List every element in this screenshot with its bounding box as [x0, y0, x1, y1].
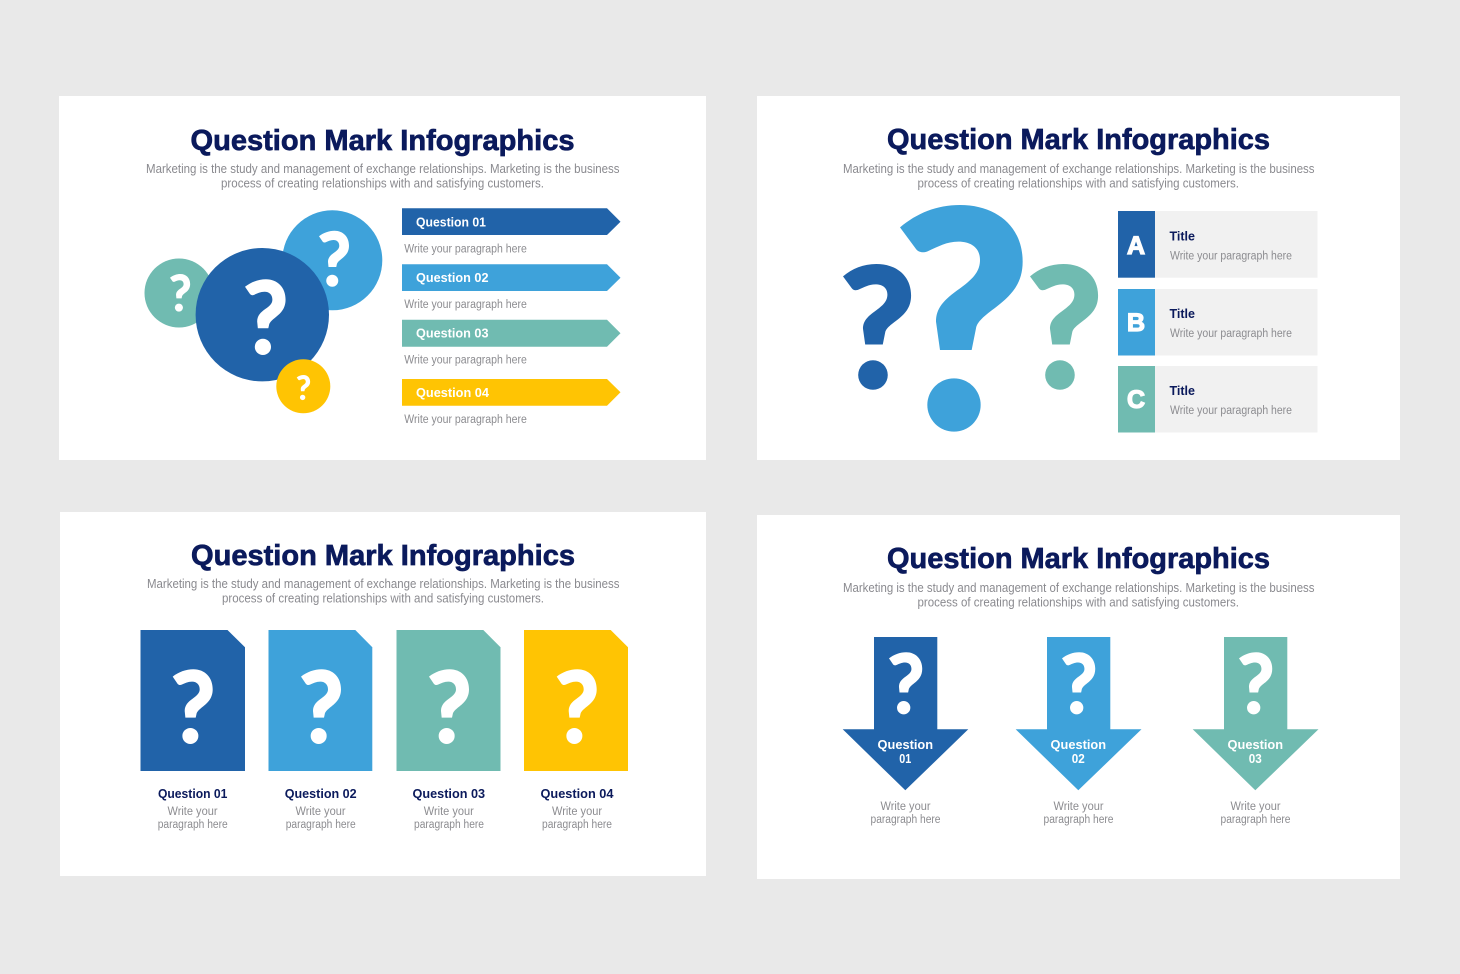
document card 02: Write your [296, 806, 346, 818]
text block: panel 3 intro [147, 577, 620, 606]
question row 01 [402, 208, 620, 256]
question row 04 [402, 379, 620, 426]
arrow 03: 03 [1249, 751, 1262, 766]
document card 01 [140, 630, 245, 831]
card C [1118, 366, 1318, 432]
text block: panel 4 intro [843, 581, 1314, 610]
question row 04: Question 04 [416, 385, 490, 400]
document card 04: Write your [552, 806, 602, 818]
document card 03: paragraph here [414, 819, 484, 831]
document card 04: paragraph here [542, 819, 612, 831]
card B: Title [1170, 306, 1195, 321]
question row 02: Write your paragraph here [404, 299, 527, 311]
panel: down arrows [757, 515, 1400, 879]
heading: panel 1 title: Question Mark Infographics [190, 125, 574, 157]
arrow 03: Write your [1230, 801, 1281, 813]
text block: panel 1 intro: process of creating relationships with and satisfying customers. [221, 176, 544, 190]
card A [1118, 211, 1318, 278]
icon: yellow circle question mark [276, 359, 330, 413]
arrow 01: Question [878, 737, 933, 752]
arrow 02 [1016, 637, 1142, 826]
panel: document cards [60, 512, 706, 876]
text block: panel 4 intro: Marketing is the study and management of exchange relationships. Marketing is the business [843, 581, 1314, 595]
question row 03 [402, 320, 620, 366]
question row 02 [402, 264, 620, 311]
arrow 02: Question [1051, 737, 1106, 752]
question row 03: Question 03 [416, 326, 488, 340]
arrow 01: paragraph here [870, 814, 940, 826]
card A: A [1127, 232, 1145, 260]
card B: Write your paragraph here [1170, 328, 1292, 340]
icon: teal question mark [1030, 264, 1098, 390]
document card 03: Question 03 [413, 786, 485, 801]
arrow 01: Write your [880, 801, 931, 813]
card A: Write your paragraph here [1170, 250, 1292, 262]
document card 02: Question 02 [285, 786, 357, 801]
question row 01: Write your paragraph here [404, 244, 527, 256]
card A: Title [1170, 228, 1195, 244]
icon: large dark blue circle question mark [196, 248, 329, 381]
question row 02: Question 02 [416, 270, 488, 285]
icon: dark blue question mark [843, 264, 911, 390]
heading: panel 4 title: Question Mark Infographics [887, 543, 1270, 575]
document card 01: paragraph here [158, 819, 228, 831]
card B [1118, 289, 1318, 356]
card C: Write your paragraph here [1170, 405, 1292, 417]
document card 04 [524, 630, 628, 831]
document card 01: Question 01 [158, 786, 227, 801]
document card 02: paragraph here [286, 819, 356, 831]
arrow 03: Question [1228, 737, 1283, 752]
text block: panel 1 intro [146, 162, 620, 190]
arrow 01 [843, 637, 968, 826]
text block: panel 2 intro: Marketing is the study and management of exchange relationships. Marketing is the business [843, 162, 1314, 176]
document card 01: Write your [168, 806, 218, 818]
question row 04: Write your paragraph here [404, 414, 527, 426]
arrow 02: paragraph here [1044, 814, 1114, 826]
panel: circles with question list [59, 96, 706, 460]
text block: panel 4 intro: process of creating relationships with and satisfying customers. [918, 596, 1239, 610]
arrow 02: 02 [1072, 751, 1085, 766]
document card 02 [268, 630, 372, 831]
text block: panel 3 intro: Marketing is the study and management of exchange relationships. Marketing is the business [147, 577, 620, 591]
heading: panel 3 title: Question Mark Infographics [191, 540, 575, 572]
arrow 03 [1193, 637, 1318, 826]
heading: panel 2 title: Question Mark Infographics [887, 124, 1270, 156]
text block: panel 3 intro: process of creating relationships with and satisfying customers. [222, 592, 544, 606]
arrow 02: Write your [1054, 801, 1104, 813]
icon: large light blue question mark [900, 205, 1023, 432]
document card 03 [396, 630, 500, 831]
card B: B [1127, 309, 1145, 337]
document card 03: Write your [424, 806, 474, 818]
icon: light blue circle question mark [282, 210, 382, 310]
icon: teal circle question mark [144, 258, 214, 328]
text block: panel 1 intro: Marketing is the study and management of exchange relationships. Marketing is the business [146, 162, 620, 176]
card C: Title [1170, 383, 1195, 398]
card C: C [1127, 386, 1145, 414]
document card 04: Question 04 [540, 786, 614, 801]
text block: panel 2 intro [843, 162, 1314, 190]
question row 03: Write your paragraph here [404, 354, 527, 366]
text block: panel 2 intro: process of creating relationships with and satisfying customers. [918, 176, 1239, 190]
question row 01: Question 01 [416, 214, 486, 230]
panel: large question marks with cards [757, 96, 1400, 460]
arrow 01: 01 [899, 751, 911, 766]
arrow 03: paragraph here [1220, 814, 1290, 826]
